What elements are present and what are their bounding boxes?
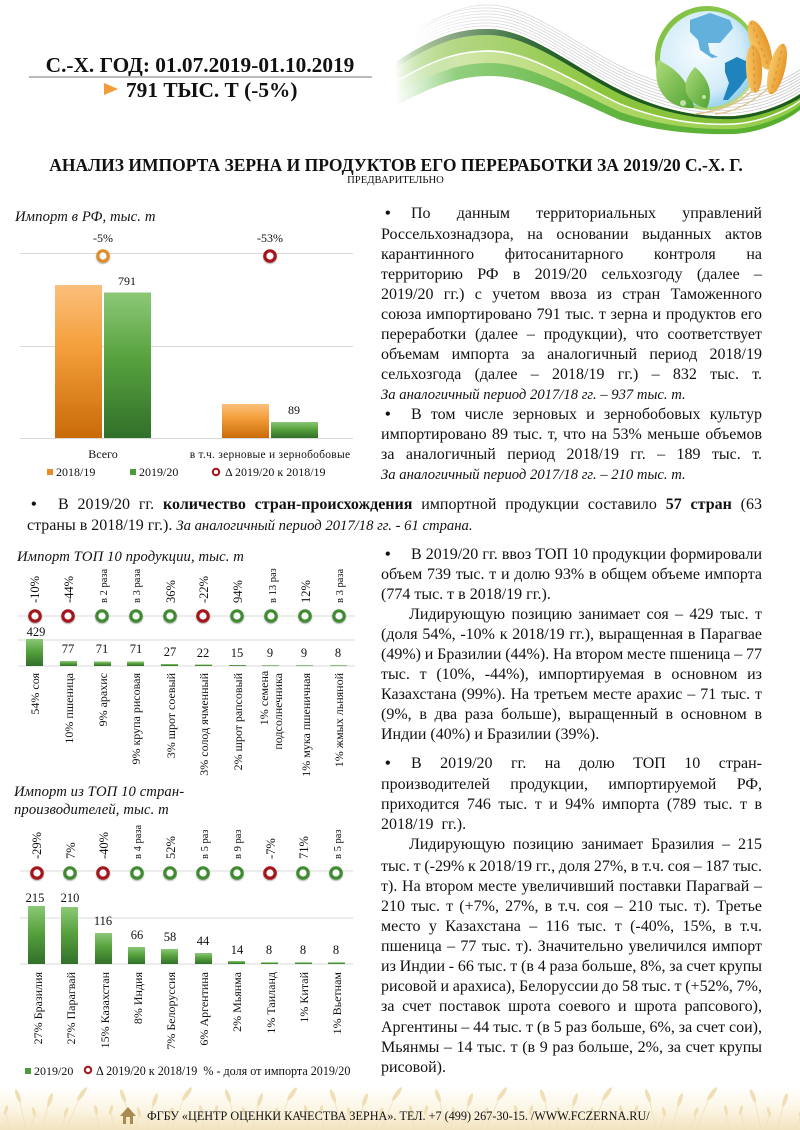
text: рисовой и арахиса), Белоруссии до 58 тыс. т (+52%, 7%, — [381, 978, 762, 995]
bar chart: top 10 products: 8 — [335, 646, 341, 660]
bar chart: top 10 countries: 8 — [300, 943, 306, 957]
bar chart: top 10 countries: -29% — [30, 832, 44, 859]
bar chart: import to Russia: 89 — [288, 403, 300, 417]
bar chart: import to Russia: 2018/19 — [56, 465, 95, 479]
bar chart: import to Russia: 2019/20 — [139, 465, 178, 479]
text: объем 739 тыс. т и долю 93% в общем объеме импорта — [381, 566, 762, 583]
bar chart: top 10 countries — [20, 824, 353, 1050]
bar chart: top 10 products — [18, 568, 355, 777]
text: 2019/20 гг.) с учетом ввоза из стран Таможенного — [381, 286, 762, 303]
bar chart: top 10 products: 12% — [299, 580, 313, 603]
text: (доля 54%, -10% к 2018/19 гг.), выращенная в Парагвае — [381, 626, 762, 643]
bar chart: top 10 countries: 8 — [333, 943, 339, 957]
bar chart: top 10 countries: 215 — [26, 891, 44, 905]
bar chart: top 10 countries: в 9 раз — [233, 829, 244, 859]
text: территорию РФ в 2019/20 сельхозгоду (далее – — [381, 266, 762, 283]
bar chart: top 10 countries: 7% — [64, 842, 78, 859]
bar chart: top 10 products: -44% — [62, 576, 76, 603]
text: Лидирующую позицию занимает Бразилия – 215 — [409, 836, 762, 853]
text: Лидирующую позицию занимает соя – 429 тыс. т — [409, 606, 762, 623]
text: Россельхознадзора, на основании выданных актов — [381, 226, 762, 243]
text: В том числе зерновых и зернобобовых культур — [411, 406, 762, 423]
chart heading: top 10 countries — [14, 784, 184, 818]
bar chart: top 10 products: 94% — [231, 580, 245, 603]
text block: countries of origin: страны в 2018/19 гг.). За аналогичный период 2017/18 гг. - 61 страна. — [27, 517, 473, 534]
text: В 2019/20 гг. на долю ТОП 10 стран- — [411, 755, 762, 772]
bar chart: top 10 countries: в 5 раз — [200, 829, 211, 859]
bar chart: top 10 countries: 6% Аргентина — [197, 971, 211, 1046]
text: 210 тыс. т (+7%, 27%, в т.ч. соя – 210 тыс. т). Третье — [381, 898, 762, 915]
text: В 2019/20 гг. ввоз ТОП 10 продукции формировали — [411, 546, 762, 563]
bar chart: top 10 products: 27 — [164, 645, 176, 659]
text: За аналогичный период 2017/18 гг. – 937 тыс. т. — [381, 387, 686, 403]
text: 2018/19 гг.). — [381, 816, 466, 833]
text: из Индии - 66 тыс. т (в 4 раза больше, 8%, за счет крупы — [381, 958, 762, 975]
bar chart: top 10 products: 1% жмых льняной — [332, 672, 346, 767]
bar chart: top 10 products: -10% — [28, 576, 42, 603]
bar chart: top 10 products: подсолнечника — [271, 672, 285, 750]
text: Индии (40%) и Бразилии (39%). — [381, 726, 599, 743]
bar chart: import to Russia: -5% — [93, 231, 113, 245]
text: Аргентины – 44 тыс. т (в 5 раз больше, 6%, за счет сои), — [381, 1019, 762, 1036]
legend: countries chart: 2019/20 — [34, 1064, 73, 1078]
text: рисовой). — [381, 1059, 446, 1076]
text: объемам импорта за аналогичный период 2018/19 — [381, 346, 762, 363]
header art: green wave with globe and wheat — [396, 4, 800, 134]
bar chart: top 10 products: 1% мука пшеничная — [299, 673, 313, 777]
footer icon: logo — [120, 1107, 136, 1124]
bar chart: import to Russia: Δ 2019/20 к 2018/19 — [225, 465, 326, 479]
bar chart: top 10 products: 9 — [267, 646, 273, 660]
footer wheat field background — [0, 1087, 800, 1130]
bar chart: top 10 countries: в 4 раза — [133, 824, 144, 859]
preliminary note: ПРЕДВАРИТЕЛЬНО — [347, 174, 444, 186]
bar chart: top 10 countries: 210 — [61, 891, 79, 905]
text: импортировано 89 тыс. т, что на 53% меньше объемов — [381, 426, 762, 443]
text: производителей продукции, импортируемой РФ, — [381, 776, 762, 793]
bar chart: top 10 countries: -40% — [97, 832, 111, 859]
text: Мьянмы – 14 тыс. т (в 9 раз больше, 2%, за счет крупы — [381, 1039, 762, 1056]
text block: top 10 countries — [381, 755, 762, 1076]
text: переработки (далее – продукции), что соответствует — [381, 326, 762, 343]
bar chart: top 10 products: 9 — [301, 646, 307, 660]
bar chart: top 10 countries: 8 — [266, 943, 272, 957]
text: за аналогичный период 2018/19 гг. – 189 тыс. т. — [381, 446, 762, 463]
bar chart: top 10 countries: 116 — [94, 914, 112, 928]
bar chart: top 10 countries: 71% — [297, 836, 311, 859]
bar chart: top 10 countries: 7% Белоруссия — [164, 972, 178, 1050]
bar chart: top 10 products: 77 — [62, 642, 74, 656]
legend: countries chart: Δ 2019/20 к 2018/19 % - доля от импорта 2019/20 — [96, 1064, 350, 1078]
text: сельхозгода (далее – 2018/19 гг.) – 832 тыс. т. — [381, 366, 762, 383]
text: (774 тыс. т в 2018/19 гг.). — [381, 586, 551, 603]
bar chart: top 10 products: 9% арахис — [96, 673, 110, 726]
bar chart: import to Russia: 791 — [118, 274, 136, 288]
bar chart: top 10 countries: 44 — [197, 934, 210, 948]
text: • — [385, 406, 391, 423]
text: т). На втором месте увеличивший поставки Парагвай – — [381, 878, 762, 895]
text: союза импортировано 791 тыс. т зерна и продуктов его — [381, 306, 762, 323]
text block: total import — [381, 205, 762, 483]
bar chart: top 10 countries: 1% Китай — [297, 971, 311, 1023]
text: (49%) и Бразилии (44%). На втором месте пшеница – 77 — [381, 646, 762, 663]
text block: countries of origin: • — [31, 496, 37, 513]
bar chart: top 10 countries: 1% Таиланд — [264, 972, 278, 1034]
text: приходится 746 тыс. т и 94% импорта (789 тыс. т в — [381, 796, 762, 813]
text: карантинного фитосанитарного контроля на — [381, 246, 762, 263]
bar chart: top 10 countries: 27% Парагвай — [64, 971, 78, 1044]
bar chart: top 10 products: 9% крупа рисовая — [129, 673, 143, 765]
bar chart: import to Russia — [20, 231, 353, 479]
text: за счет поставок шрота соевого и шрота рапсового), — [381, 998, 762, 1015]
bar chart: top 10 countries: 14 — [231, 943, 244, 957]
key figure: total import: 791 ТЫС. Т (-5%) — [126, 78, 297, 102]
bar chart: top 10 countries: в 5 раз — [333, 829, 344, 859]
bar chart: top 10 products: 429 — [27, 625, 45, 639]
text: тыс. т (-29% к 2018/19 гг., доля 27%, в т.ч. соя – 187 тыс. — [381, 858, 762, 875]
bar chart: top 10 products: в 13 раз — [268, 568, 279, 603]
bar chart: top 10 countries: 27% Бразилия — [31, 972, 45, 1044]
bar chart: import to Russia: -53% — [257, 231, 283, 245]
chart heading: import to Russia: Импорт в РФ, тыс. т — [15, 209, 156, 225]
bar chart: top 10 products: 22 — [197, 646, 209, 660]
bar chart: top 10 products: -22% — [197, 576, 211, 603]
bar chart: top 10 products: 54% соя — [28, 673, 42, 715]
text: • — [385, 205, 391, 222]
bar chart: top 10 countries: 58 — [164, 930, 176, 944]
bar chart: top 10 products: 15 — [231, 646, 243, 660]
bar chart: top 10 products: 1% семена — [257, 670, 271, 725]
text: За аналогичный период 2017/18 гг. – 210 тыс. т. — [381, 467, 686, 483]
chart heading: top 10 countries: производителей, тыс. т — [14, 802, 169, 818]
bar chart: top 10 products: 3% солод ячменный — [197, 672, 211, 776]
text: Казахстана (99%). На третьем месте арахис – 71 тыс. т — [381, 686, 762, 703]
text: • — [385, 546, 391, 563]
bar chart: top 10 products: 36% — [164, 580, 178, 603]
bar chart: top 10 products: в 3 раза — [335, 568, 346, 603]
text: тыс. т (10%, -44%), импортируемая в основном из — [381, 666, 762, 683]
bar chart: top 10 products: 71 — [96, 642, 108, 656]
text: пшеница – 77 тыс. т). Значительно увеличился импорт — [381, 938, 762, 955]
text block: top 10 products — [381, 546, 762, 743]
chart heading: top 10 countries: Импорт из ТОП 10 стран- — [14, 784, 184, 800]
bar chart: top 10 countries: -7% — [264, 838, 278, 859]
text: (9%, в два раза больше), выращенный в основном в — [381, 706, 762, 723]
main heading: АНАЛИЗ ИМПОРТА ЗЕРНА И ПРОДУКТОВ ЕГО ПЕРЕРАБОТКИ ЗА 2019/20 С.-Х. Г. — [49, 155, 743, 175]
bar chart: top 10 countries: 15% Казахстан — [98, 971, 112, 1048]
bar chart: top 10 products: 71 — [130, 642, 142, 656]
bar chart: import to Russia: Всего — [88, 447, 118, 461]
text: место у Казахстана – 116 тыс. т (-40%, 15%, в т.ч. — [381, 918, 762, 935]
bar chart: top 10 products: 3% шрот соевый — [164, 672, 178, 758]
bar chart: top 10 products: 10% пшеница — [62, 672, 76, 744]
title: season dates: С.-Х. ГОД: 01.07.2019-01.10.2019 — [46, 53, 354, 77]
footer text: contacts: ФГБУ «ЦЕНТР ОЦЕНКИ КАЧЕСТВА ЗЕРНА». ТЕЛ. +7 (499) 267-30-15. /WWW.FCZERNA.RU/ — [147, 1109, 650, 1123]
bar chart: top 10 countries: 8% Индия — [131, 972, 145, 1024]
chart heading: top 10 products: Импорт ТОП 10 продукции, тыс. т — [17, 549, 244, 565]
bar chart: top 10 products: в 2 раза — [99, 568, 110, 603]
bar chart: top 10 countries: 2% Мьянма — [230, 971, 244, 1032]
bar chart: top 10 countries: 1% Вьетнам — [330, 972, 344, 1034]
text block: countries of origin — [27, 496, 762, 534]
text block: countries of origin: В 2019/20 гг. количество стран-происхождения импортной продукции составило 57 стран (63 — [58, 496, 762, 513]
text: • — [385, 755, 391, 772]
bar chart: top 10 countries: 66 — [131, 928, 143, 942]
text: По данным территориальных управлений — [411, 205, 762, 222]
bar chart: import to Russia: в т.ч. зерновые и зернобобовые — [190, 449, 350, 461]
bar chart: top 10 countries: 52% — [164, 836, 178, 859]
bar chart: top 10 products: 2% шрот рапсовый — [231, 672, 245, 770]
bar chart: top 10 products: в 3 раза — [132, 568, 143, 603]
